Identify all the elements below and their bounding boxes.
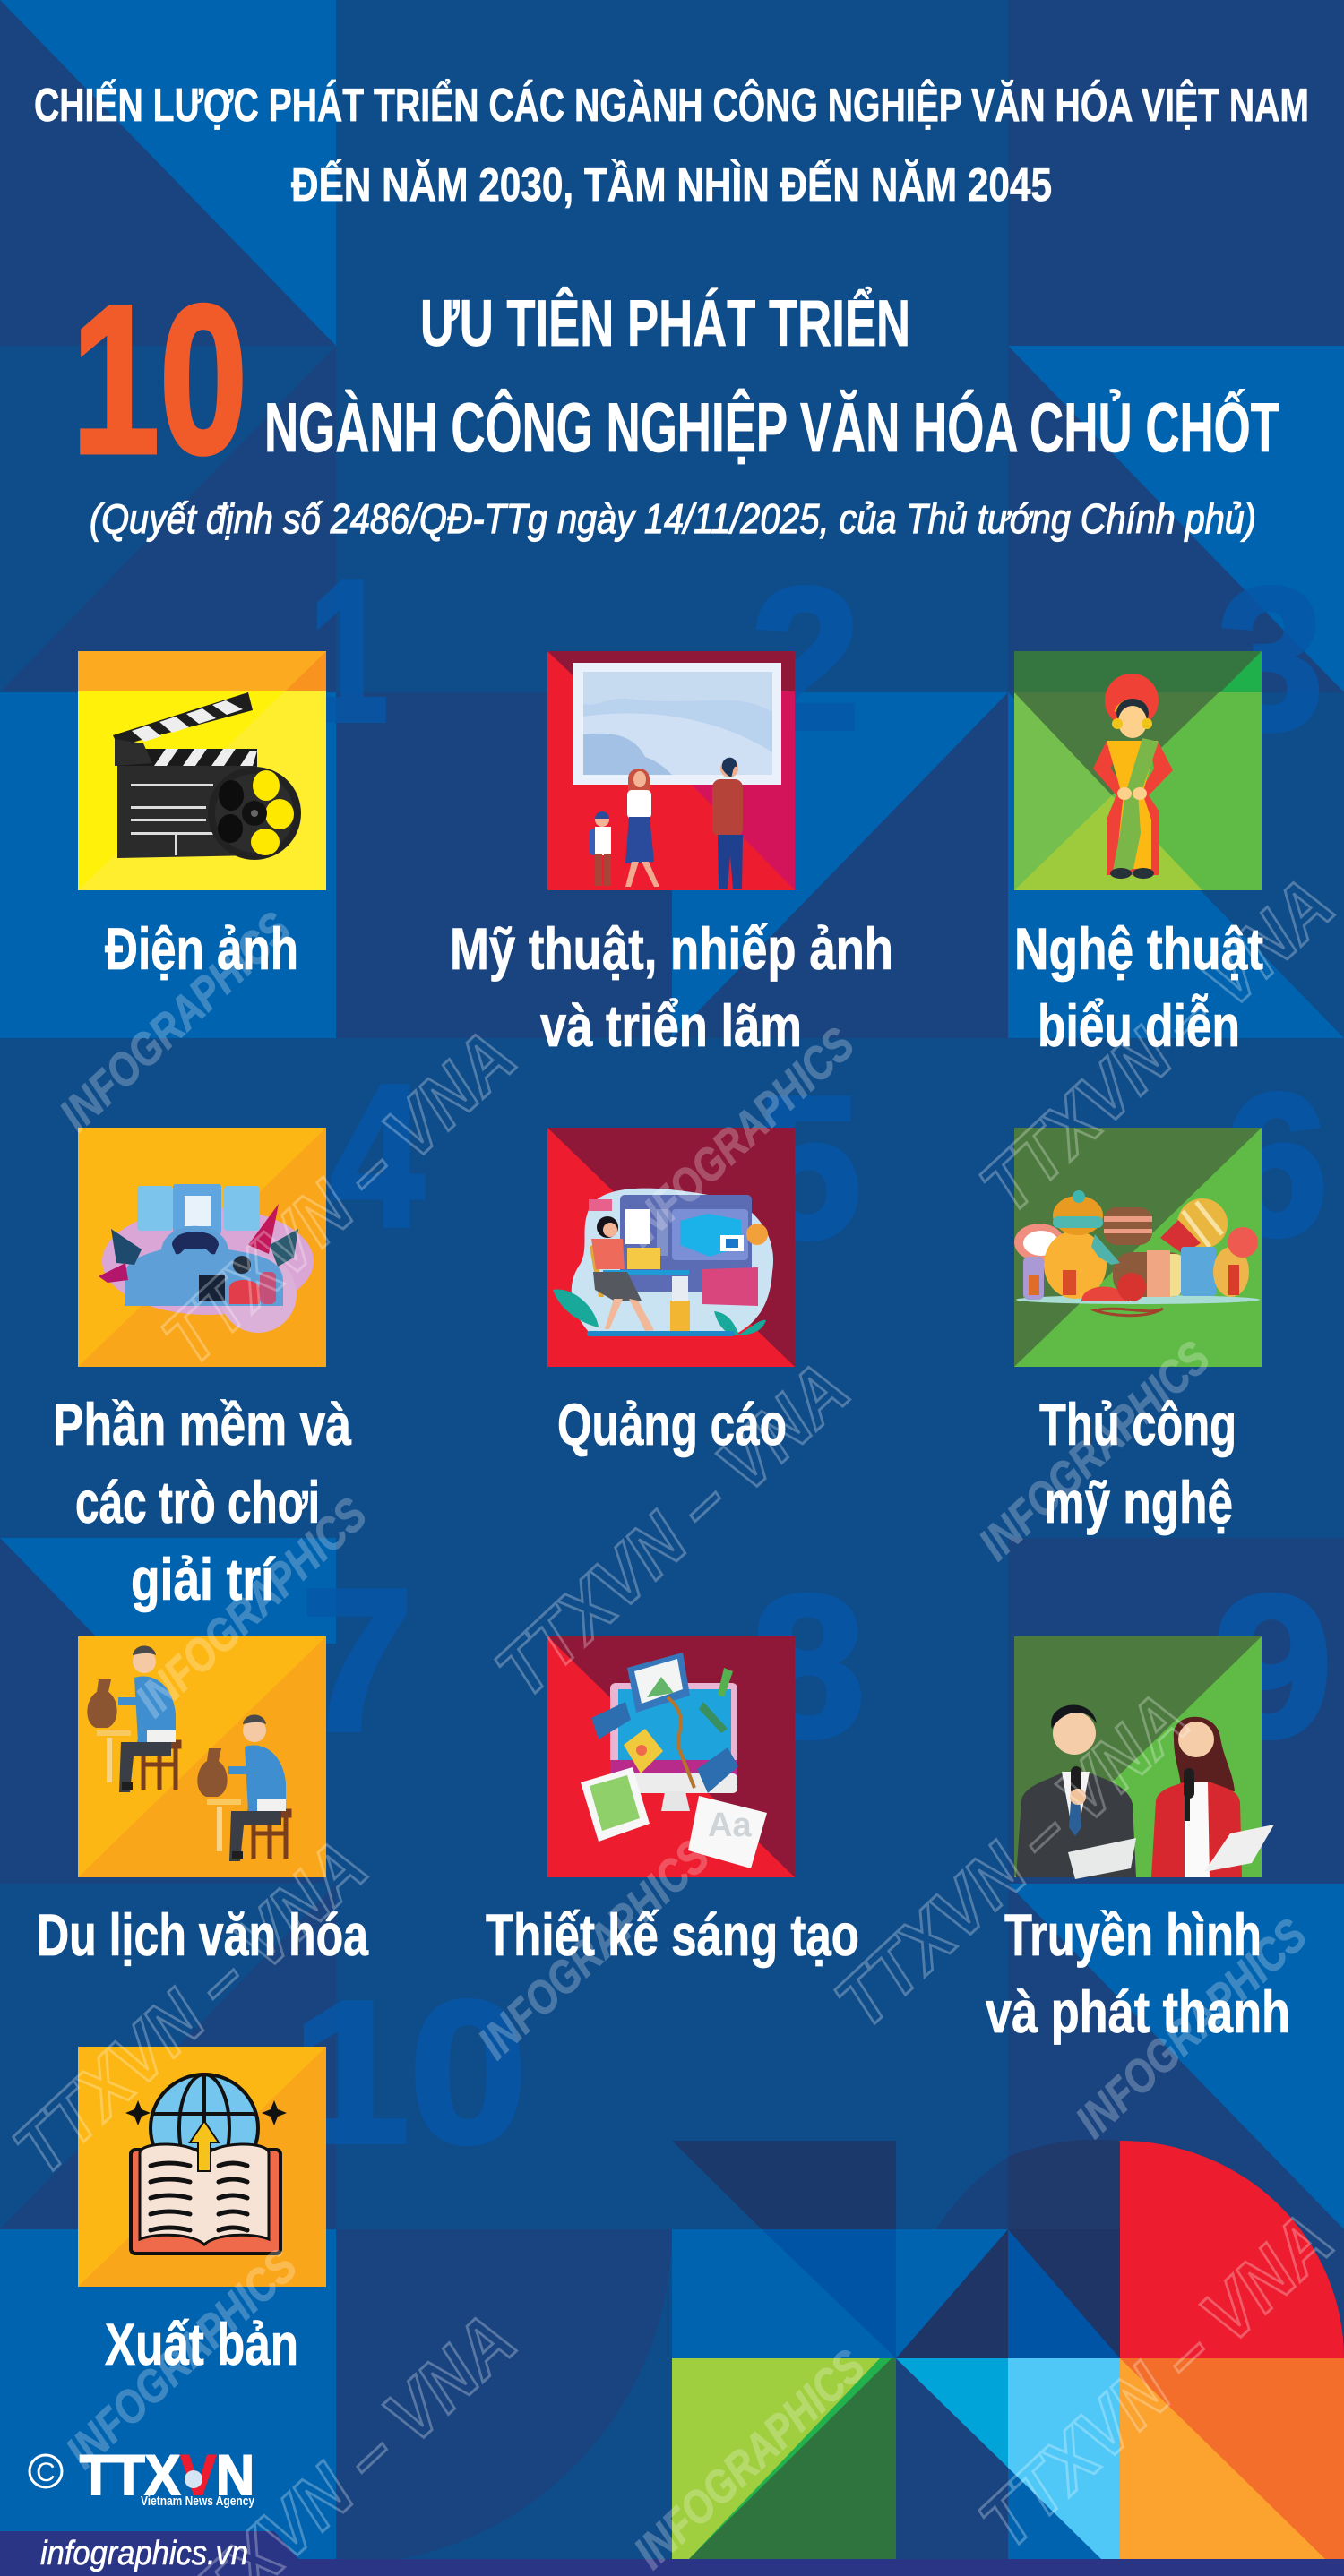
watermarks: TTXVN – VNA bbox=[819, 1677, 1204, 2044]
faint background numbers 1 to 10: 9 bbox=[1213, 1553, 1332, 1779]
faint background numbers 1 to 10: 2 bbox=[751, 545, 860, 771]
main heading bbox=[264, 288, 1279, 467]
tile 1: cinema clapperboard bbox=[78, 651, 326, 890]
TTXVN logo: C bbox=[36, 2458, 56, 2487]
tile 8: creative design, monitor: Aa bbox=[708, 1807, 752, 1844]
faint background numbers 1 to 10: 4 bbox=[331, 1043, 424, 1268]
faint background numbers 1 to 10: 5 bbox=[755, 1054, 861, 1280]
faint background numbers 1 to 10: 1 bbox=[309, 537, 388, 763]
labels for the ten industries: và triển lãm bbox=[540, 992, 802, 1059]
watermarks: INFOGRAPHICS bbox=[126, 1489, 377, 1727]
labels for the ten industries: Mỹ thuật, nhiếp ảnh bbox=[450, 915, 893, 982]
title: strategy heading bbox=[34, 79, 1309, 211]
faint background numbers 1 to 10: 10 bbox=[292, 1959, 527, 2185]
labels for the ten industries bbox=[37, 915, 1290, 2377]
watermarks: TTXVN – VNA bbox=[479, 1346, 865, 1713]
labels for the ten industries: Xuất bản bbox=[105, 2311, 298, 2377]
labels for the ten industries: Thủ công bbox=[1039, 1391, 1236, 1457]
faint background numbers 1 to 10: 6 bbox=[1222, 1052, 1328, 1277]
faint background numbers 1 to 10: 3 bbox=[1218, 545, 1323, 771]
labels for the ten industries: Nghệ thuật bbox=[1014, 915, 1263, 982]
watermarks: INFOGRAPHICS bbox=[50, 903, 301, 1141]
faint background numbers 1 to 10: 7 bbox=[301, 1547, 413, 1773]
watermarks: TTXVN – VNA bbox=[0, 1824, 383, 2191]
tile 5: advertising, designer at desk bbox=[547, 1128, 795, 1367]
labels for the ten industries: biểu diễn bbox=[1038, 992, 1240, 1059]
website address: infographics.vn bbox=[40, 2535, 248, 2572]
labels for the ten industries: giải trí bbox=[131, 1546, 276, 1612]
big number 10: 10 bbox=[72, 262, 247, 498]
faint background numbers 1 to 10 bbox=[292, 537, 1332, 2185]
watermarks: TTXVN – VNA bbox=[146, 1014, 531, 1381]
labels for the ten industries: các trò chơi bbox=[75, 1469, 320, 1535]
decorative colour blocks bottom right bbox=[672, 2140, 1344, 2559]
tile 7: cultural tourism, potters bbox=[78, 1636, 326, 1877]
labels for the ten industries: Du lịch văn hóa bbox=[37, 1902, 369, 1968]
TTXVN logo: TTXVN bbox=[80, 2444, 254, 2507]
faint background numbers 1 to 10: 8 bbox=[751, 1553, 865, 1779]
tile 2: fine art gallery bbox=[547, 651, 795, 890]
footer strip bbox=[0, 2531, 1344, 2576]
tile 9: television and radio anchors bbox=[1014, 1636, 1274, 1879]
watermarks: INFOGRAPHICS bbox=[625, 2340, 875, 2576]
watermarks: INFOGRAPHICS bbox=[469, 1831, 719, 2069]
watermarks: INFOGRAPHICS bbox=[969, 1332, 1220, 1570]
TTXVN logo: Vietnam News Agency bbox=[141, 2494, 254, 2509]
labels for the ten industries: Quảng cáo bbox=[557, 1391, 787, 1457]
title: strategy heading: ĐẾN NĂM 2030, TẦM NHÌN ĐẾN NĂM 2045 bbox=[291, 159, 1052, 211]
tile 4: software and games bbox=[78, 1128, 326, 1367]
labels for the ten industries: Thiết kế sáng tạo bbox=[486, 1902, 859, 1968]
tile 3: performing arts, woman in ao dai bbox=[1014, 651, 1262, 890]
watermarks: INFOGRAPHICS bbox=[56, 2240, 307, 2478]
tile 8: creative design, monitor bbox=[547, 1636, 795, 1877]
main heading: ƯU TIÊN PHÁT TRIỂN bbox=[420, 288, 910, 360]
labels for the ten industries: Truyền hình bbox=[1004, 1902, 1262, 1968]
watermarks: INFOGRAPHICS bbox=[614, 1018, 865, 1257]
labels for the ten industries: Phần mềm và bbox=[53, 1391, 351, 1457]
labels for the ten industries: mỹ nghệ bbox=[1044, 1469, 1233, 1535]
tile 10: publishing, book and globe bbox=[78, 2047, 326, 2287]
labels for the ten industries: Điện ảnh bbox=[105, 915, 298, 982]
watermarks bbox=[0, 862, 1344, 2576]
tile 6: handicrafts bbox=[1014, 1128, 1262, 1367]
